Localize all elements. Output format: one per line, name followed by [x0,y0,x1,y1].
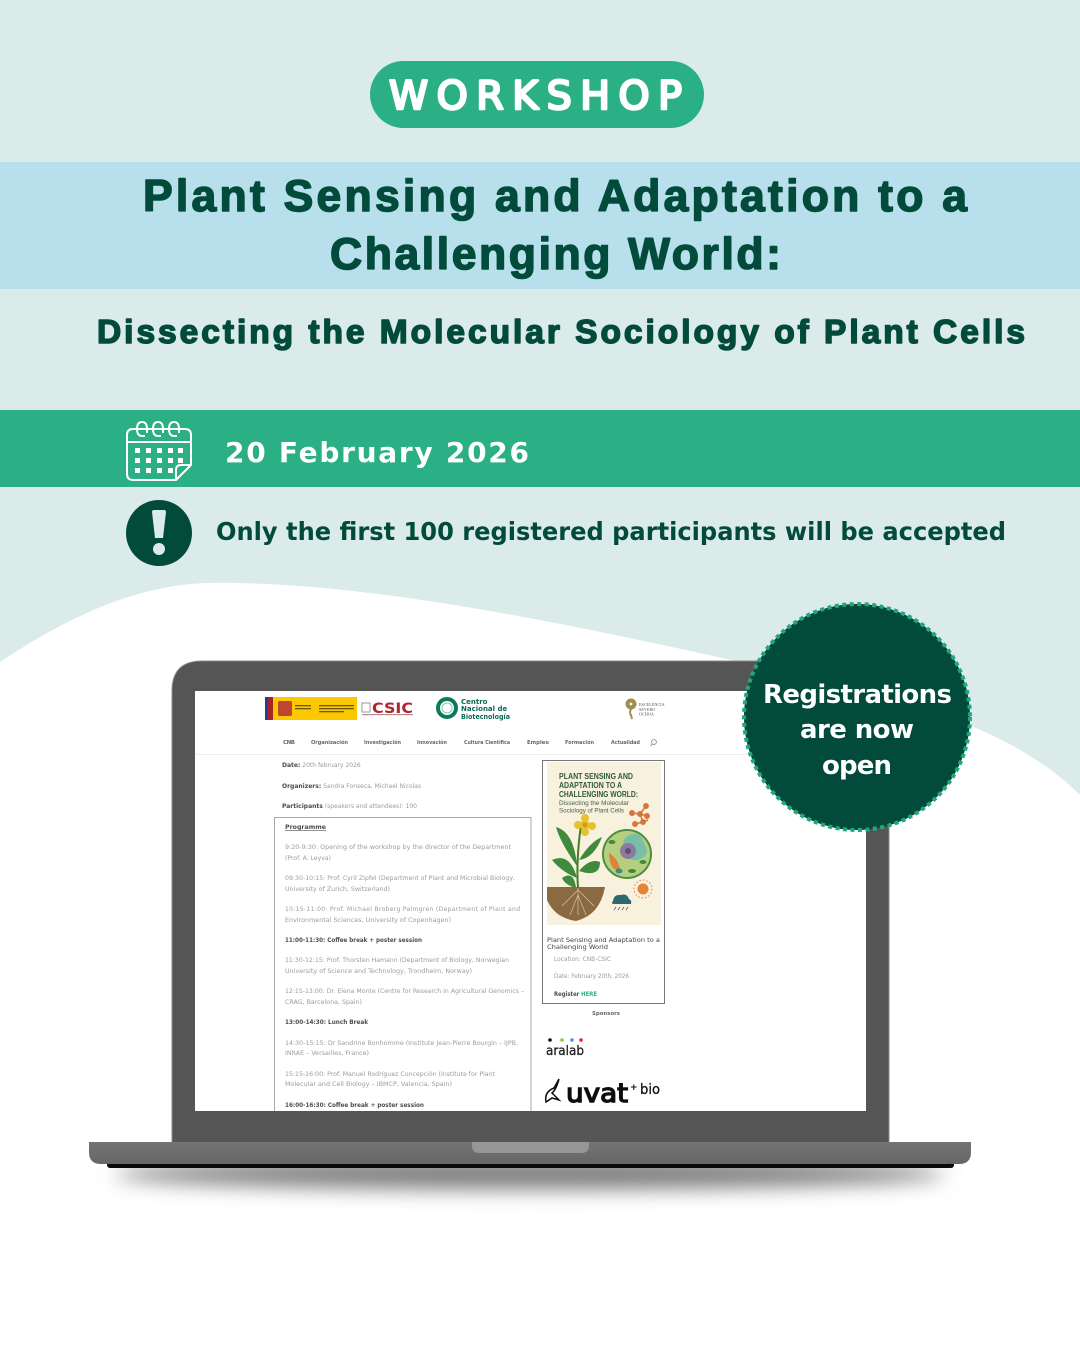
badge: registrations open: open [822,751,892,781]
navigation menu: CNB [283,740,295,746]
sun [634,880,652,898]
soil and roots [547,885,605,921]
laptop [89,661,971,1189]
date band [0,410,1080,487]
logo: uvat bio: bio [640,1082,660,1098]
logo: uvat bio: + [630,1083,638,1093]
navigation menu [195,739,866,755]
poster: Dissecting the Molecular [559,800,629,807]
logo: Severo Ochoa: ESCELENCIA [639,702,665,707]
event card: Date: February 20th, 2026 [554,973,629,980]
programme box: INRAE – Versailles, France) [285,1050,369,1057]
navigation menu: Organización [311,739,348,746]
navigation menu: Investigación [364,739,401,746]
programme box: 14:30-15:15: Dr Sandrine Bonhomme (Institute Jean-Pierre Bourgin – IJPB, [285,1040,518,1047]
navigation menu: Innovación [417,739,447,746]
poster: Sociology of Plant Cells [559,808,624,814]
plant [552,814,602,888]
title band: Plant Sensing and Adaptation to a [143,172,968,221]
logo: CNB: Nacional de [461,705,507,713]
programme box: CRAG, Barcelona, Spain) [285,999,362,1006]
programme box [274,818,531,1111]
logo: Severo Ochoa: OCHOA [639,712,654,716]
logo: aralab: aralab [546,1044,584,1059]
logo: Severo Ochoa [626,698,665,719]
programme box: 9:20-9:30: Opening of the workshop by the director of the Department [285,844,512,851]
event card: Location: CNB-CSIC [554,956,611,963]
programme box: (Prof. A. Leyva) [285,855,331,862]
poster: CHALLENGING WORLD: [559,790,638,799]
logo: CNB [438,698,510,721]
subtitle: Dissecting the Molecular Sociology of Plant Cells [97,314,1025,351]
programme box: 11:30-12:15: Prof. Thorsten Hamann (Department of Biology, Norwegian [285,957,509,964]
notice text: Only the first 100 registered participants will be accepted [216,517,1006,546]
poster: PLANT SENSING AND [559,772,633,781]
badge: workshop: WORKSHOP [389,73,682,119]
sponsors: Sponsors [592,1011,621,1017]
laptop lid [172,661,889,1143]
badge: workshop [370,61,704,128]
event card: Challenging World [547,943,608,951]
logo: CNB: Biotecnología [461,713,510,721]
logo: CSIC: CSIC [372,701,413,717]
programme box: Programme [285,824,326,831]
title band [0,162,1080,289]
logo: uvat bio [546,1079,660,1109]
programme box: 12:15-13:00: Dr. Elena Monte (Centre for Research in Agricultural Genomics – [285,988,524,995]
logo: uvat bio: uvat [566,1079,628,1109]
event card [542,760,664,1004]
molecule [630,804,649,826]
laptop shadow [115,1159,945,1189]
programme box: 13:00-14:30: Lunch Break [285,1019,369,1026]
programme box: University of Zurich, Switzerland) [285,886,390,893]
programme box: 10:15-11:00: Prof. Michael Broberg Palmgren (Department of Plant and [285,906,520,913]
event card: Register HERE [554,991,597,998]
programme box: 15:15-16:00: Prof. Manuel Rodríguez Concepción (Institute for Plant [285,1071,496,1078]
poster [547,762,661,925]
laptop screen [195,691,866,1111]
programme box: 16:00-16:30: Coffee break + poster session [285,1102,424,1109]
programme box: University of Science and Technology, Trondheim, Norway) [285,968,472,975]
badge: registrations open: Registrations [763,680,952,710]
event details: Participants (speakers and attendees): 100 [282,803,417,810]
poster: ADAPTATION TO A [559,781,622,790]
navigation menu: Formación [565,739,594,746]
logo: Severo Ochoa: SEVERO [639,707,655,712]
logo: government of Spain [265,697,357,720]
event details [282,762,421,810]
event card: Plant Sensing and Adaptation to a [547,936,660,944]
sponsors [546,1011,660,1109]
programme box: Environmental Sciences, University of Copenhagen) [285,917,451,924]
badge: registrations open: are now [800,715,914,745]
badge: registrations open [744,604,970,830]
icon: calendar [127,422,191,480]
navigation menu: Actualidad [611,740,640,746]
navigation menu: Cultura Científica [464,739,510,746]
programme box: 11:00-11:30: Coffee break + poster session [285,937,422,944]
logo: CNB: Centro [461,698,488,706]
date text: 20 February 2026 [225,436,529,469]
rain cloud [612,894,631,910]
icon: exclamation [126,500,192,566]
plant cell [603,830,651,878]
event details: Date: 20th february 2026 [282,762,361,769]
programme box: Molecular and Cell Biology – IBMCP, Valencia, Spain) [285,1081,452,1088]
laptop base [89,1142,971,1168]
title band: Challenging World: [330,230,781,279]
event details: Organizers: Sandra Fonseca, Michael Nicolas [282,783,421,790]
programme box: 09:30-10:15: Prof. Cyril Zipfel (Department of Plant and Microbial Biology, [285,875,515,882]
navigation menu: Empleo [527,740,549,746]
